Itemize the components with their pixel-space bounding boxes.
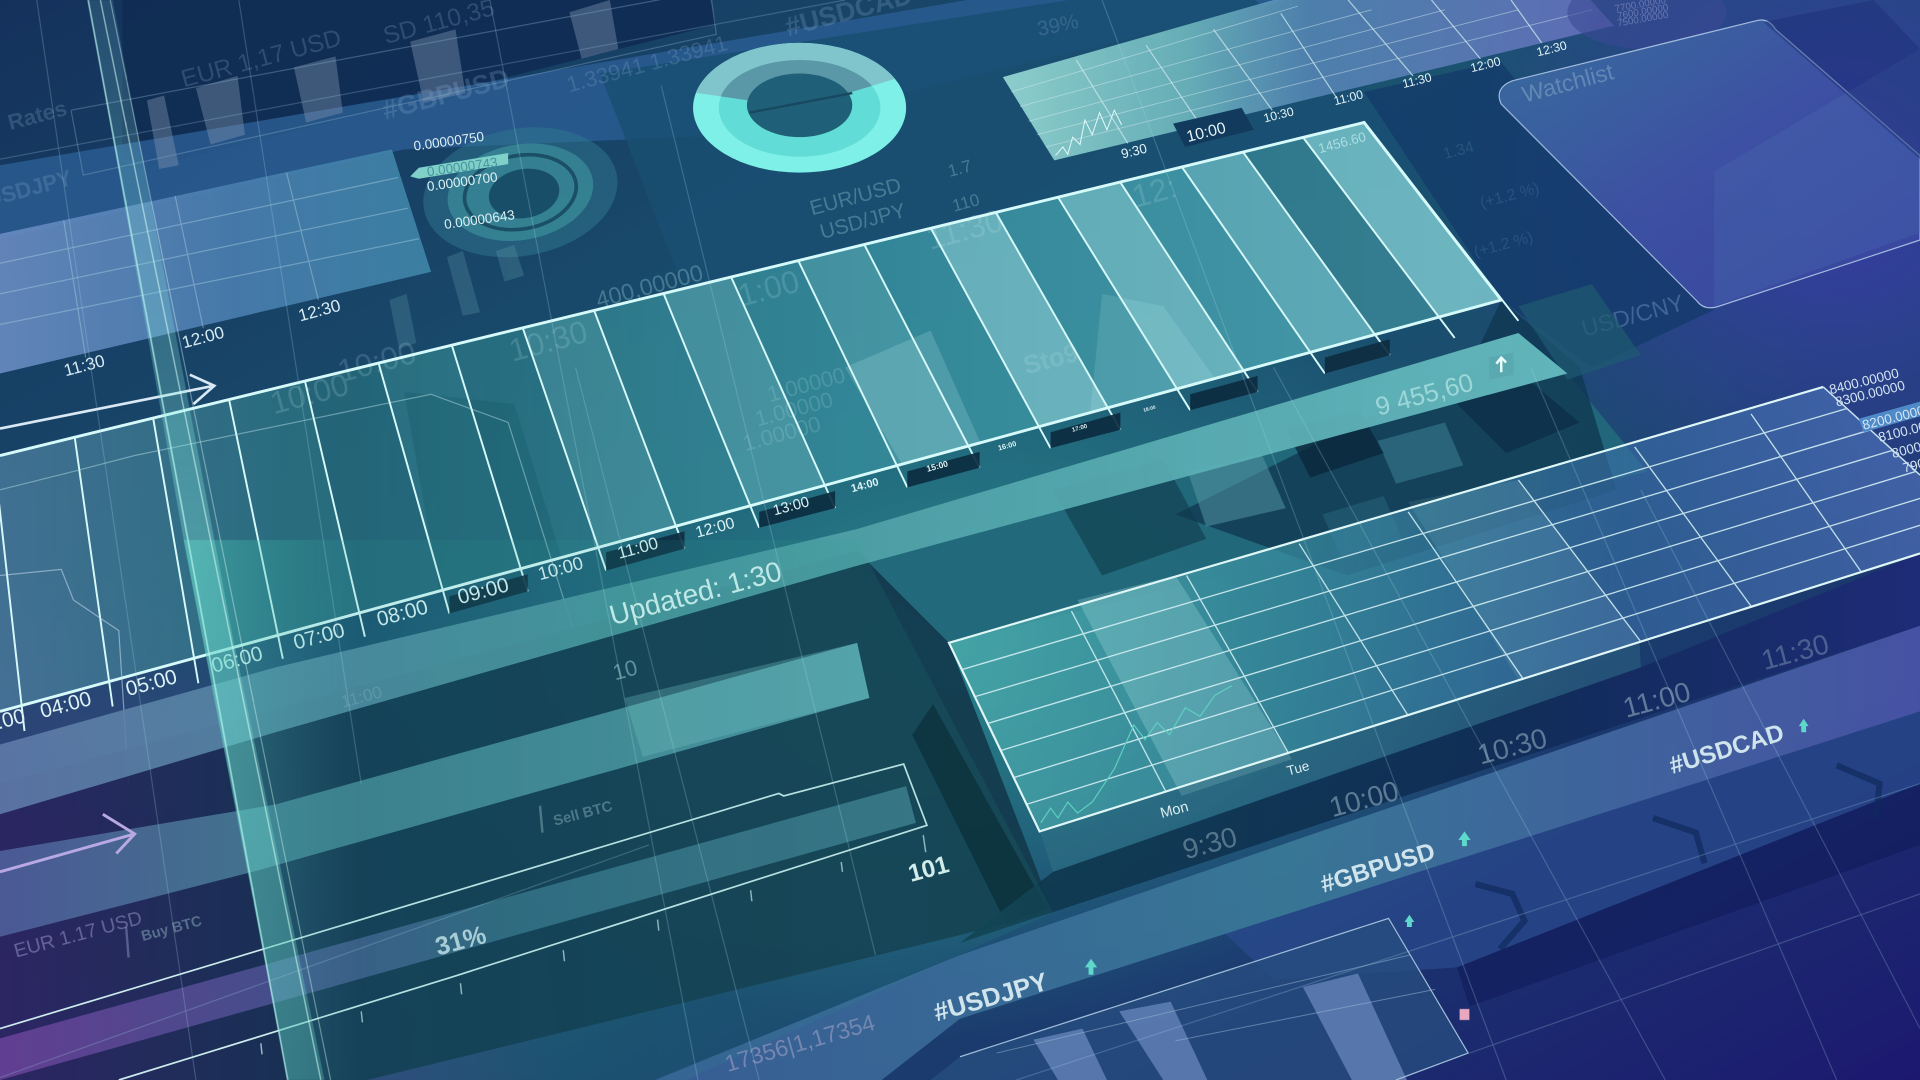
top faded labels: 1.33941 1.33941 bbox=[564, 30, 730, 97]
updated label: Updated: 1:30 bbox=[606, 555, 785, 631]
time axis labels: 10:00 bbox=[535, 552, 585, 584]
ticker labels: #USDJPY bbox=[931, 968, 1051, 1027]
center dark panel text: 110 bbox=[950, 189, 982, 216]
faded numbers: 11:00 bbox=[339, 682, 384, 712]
time axis labels: 04:00 bbox=[38, 687, 94, 723]
band: updated bbox=[0, 333, 1567, 814]
time axis labels: 13:00 bbox=[771, 494, 811, 519]
stepped polyline bbox=[0, 394, 576, 637]
dark blue side panel text: (+1.2 %) bbox=[1472, 229, 1535, 261]
dark blocks behind main chart bbox=[1053, 284, 1641, 576]
ticker labels bbox=[931, 719, 1787, 1027]
center dark panel text bbox=[593, 155, 982, 313]
time axis labels: 06:00 bbox=[209, 642, 265, 678]
faded background labels: 10:30 bbox=[505, 313, 591, 368]
axis labels bbox=[1119, 38, 1568, 162]
watchlist heading: Watchlist bbox=[1519, 58, 1617, 108]
progress bar bbox=[0, 764, 952, 1080]
time axis labels: 12:00 bbox=[694, 515, 737, 542]
axis labels: 12:30 bbox=[1535, 38, 1568, 59]
price line bbox=[1041, 686, 1232, 823]
axis cells bbox=[449, 339, 1390, 613]
column lines bbox=[0, 122, 1518, 731]
time axis labels: 09:00 bbox=[455, 573, 511, 609]
gauge values bbox=[410, 129, 516, 232]
dark lower band bbox=[0, 551, 1053, 1080]
ticker labels: #GBPUSD bbox=[1317, 838, 1438, 899]
faded background labels: 1.00000 bbox=[765, 362, 848, 407]
concentric ring gauge bbox=[410, 113, 628, 272]
center dark panel text: EUR/USD bbox=[807, 174, 904, 220]
time axis labels: 07:00 bbox=[291, 619, 347, 654]
time labels lower: 9:30 bbox=[1179, 821, 1240, 865]
mini candlestick line bbox=[1056, 110, 1122, 156]
dark blue side panel text bbox=[1442, 139, 1541, 261]
sell and buy labels bbox=[126, 798, 615, 958]
day labels: Mon bbox=[1159, 799, 1190, 822]
faded background labels: 12: bbox=[1128, 168, 1180, 215]
dark edge around lower chart bbox=[912, 704, 1047, 924]
time axis labels: 18:00 bbox=[1143, 405, 1157, 414]
progress percent: 31% bbox=[432, 921, 489, 961]
up arrow icon bbox=[1489, 353, 1513, 380]
ticker arrows bbox=[1085, 719, 1809, 975]
faded background labels bbox=[266, 168, 1180, 456]
scale labels top right: 7500.00000 bbox=[1616, 10, 1670, 29]
stepped teal connector bbox=[0, 569, 129, 784]
top faded bars bbox=[147, 0, 618, 169]
gauge values: 0.00000743 bbox=[426, 155, 498, 179]
scale labels top right bbox=[1614, 0, 1670, 29]
dark strip under lower chart bbox=[960, 553, 1920, 943]
time axis labels: 16:00 bbox=[997, 439, 1017, 453]
time labels lower: 10:30 bbox=[1474, 722, 1550, 770]
chart frame bbox=[0, 122, 1501, 711]
time labels lower bbox=[1179, 628, 1832, 865]
faded background labels: 1:00 bbox=[734, 263, 803, 314]
axis labels: 9:30 bbox=[1119, 141, 1149, 162]
time axis labels: 15:00 bbox=[925, 458, 949, 474]
time labels: 12:00 bbox=[180, 322, 226, 352]
faded background labels: Sto9 bbox=[1020, 339, 1082, 380]
faded background labels: 1.00000 bbox=[752, 387, 836, 431]
donut chart bbox=[693, 43, 906, 173]
time labels lower: 10:00 bbox=[1326, 775, 1402, 823]
faded background labels: 10:00 bbox=[266, 366, 353, 421]
top faded labels bbox=[0, 0, 1081, 212]
top faded labels: Rates bbox=[5, 95, 69, 135]
faded background labels: 11:30 bbox=[923, 202, 1006, 257]
time labels lower: 11:30 bbox=[1758, 628, 1832, 676]
time labels: 12:30 bbox=[296, 295, 343, 325]
gauge values: 0.00000643 bbox=[443, 207, 516, 232]
panel: watchlist bbox=[1499, 0, 1920, 308]
frame bbox=[949, 387, 1920, 831]
time axis labels: 08:00 bbox=[374, 595, 431, 631]
panel: top-right grid chart bbox=[1003, 0, 1670, 162]
right scale: 8400.00000 bbox=[1828, 365, 1900, 397]
progress ticks bbox=[261, 835, 926, 1054]
faded columns under gauge bbox=[389, 245, 524, 349]
top faded outline bbox=[71, 0, 716, 175]
band: second light bar bbox=[0, 643, 869, 937]
marker bbox=[1460, 1009, 1469, 1020]
axis labels: 11:30 bbox=[1401, 70, 1433, 91]
sell and buy labels: Sell BTC bbox=[552, 798, 615, 830]
arrow: upper bbox=[0, 375, 214, 429]
lower band under ticker bbox=[1224, 711, 1920, 980]
scale labels top right: 7600.00000 bbox=[1616, 2, 1670, 22]
ticker band bbox=[655, 626, 1920, 1080]
top faded labels: #GBPUSD bbox=[379, 63, 513, 125]
mid fill between main band and lower chart bbox=[857, 373, 1647, 643]
top dark ticker region bbox=[0, 0, 1469, 294]
ticker labels: #USDCAD bbox=[1666, 719, 1787, 780]
dark blue side panel bbox=[1364, 61, 1714, 367]
time axis labels: 11:00 bbox=[615, 533, 660, 563]
center dark panel text: USD/JPY bbox=[817, 199, 908, 244]
center dark panel text: 400,00000 bbox=[593, 259, 706, 313]
axis labels: 10:00 bbox=[1185, 120, 1228, 146]
glass pane bbox=[184, 540, 1053, 1080]
day labels: Tue bbox=[1285, 758, 1311, 778]
chart columns bbox=[305, 122, 1518, 637]
bottom bar panel bbox=[931, 918, 1469, 1080]
grid lines bbox=[961, 387, 1920, 804]
faded value 10: 10 bbox=[610, 655, 640, 685]
dark blue side panel text: 1.34 bbox=[1442, 139, 1476, 163]
time axis labels: 17:00 bbox=[1071, 423, 1089, 434]
value readout: 9 455,60 bbox=[1373, 369, 1476, 422]
top faded labels: 39% bbox=[1035, 10, 1081, 41]
gauge values: 0.00000750 bbox=[413, 129, 485, 154]
progress max: 101 bbox=[905, 851, 952, 888]
top faded labels: EUR 1,17 USD bbox=[178, 25, 344, 93]
faded background labels: 10:00 bbox=[334, 334, 420, 389]
faded background labels: 1.00000 bbox=[740, 411, 823, 456]
time axis labels bbox=[0, 405, 1157, 740]
vertical glass beam bbox=[88, 0, 331, 1080]
center dark panel text: 1.7 bbox=[946, 155, 974, 181]
time labels: 11:30 bbox=[61, 350, 107, 380]
chart top-right value: 1456.60 bbox=[1317, 129, 1368, 156]
day labels bbox=[1159, 758, 1311, 822]
sell and buy labels: Buy BTC bbox=[140, 913, 204, 945]
arrow: lower bbox=[0, 814, 135, 872]
time labels lower: 11:00 bbox=[1620, 676, 1694, 724]
time labels bbox=[61, 295, 343, 380]
main bar chart bbox=[0, 122, 1518, 740]
time axis labels: 05:00 bbox=[123, 665, 179, 701]
price strip: 17356|1,17354 bbox=[722, 1009, 878, 1077]
dark blue side panel text: (+1.2 %) bbox=[1478, 180, 1541, 212]
axis labels: 10:30 bbox=[1262, 104, 1295, 125]
axis labels: 11:00 bbox=[1332, 87, 1365, 108]
label: USD/CNY: USD/CNY bbox=[1579, 289, 1687, 342]
axis labels: 12:00 bbox=[1469, 54, 1502, 75]
right scale bbox=[1828, 365, 1920, 476]
gauge values: 0.00000700 bbox=[426, 169, 498, 194]
dark circle top right bbox=[1567, 0, 1727, 49]
lower-right dark strip with notches bbox=[1457, 765, 1920, 1007]
time axis labels: 14:00 bbox=[850, 476, 880, 495]
panel: top-left chart bbox=[0, 149, 431, 380]
right scale: 8300.00000 bbox=[1834, 378, 1906, 409]
panel: lower grid chart bbox=[949, 365, 1920, 872]
faded EUR label: EUR 1.17 USD bbox=[12, 907, 144, 962]
